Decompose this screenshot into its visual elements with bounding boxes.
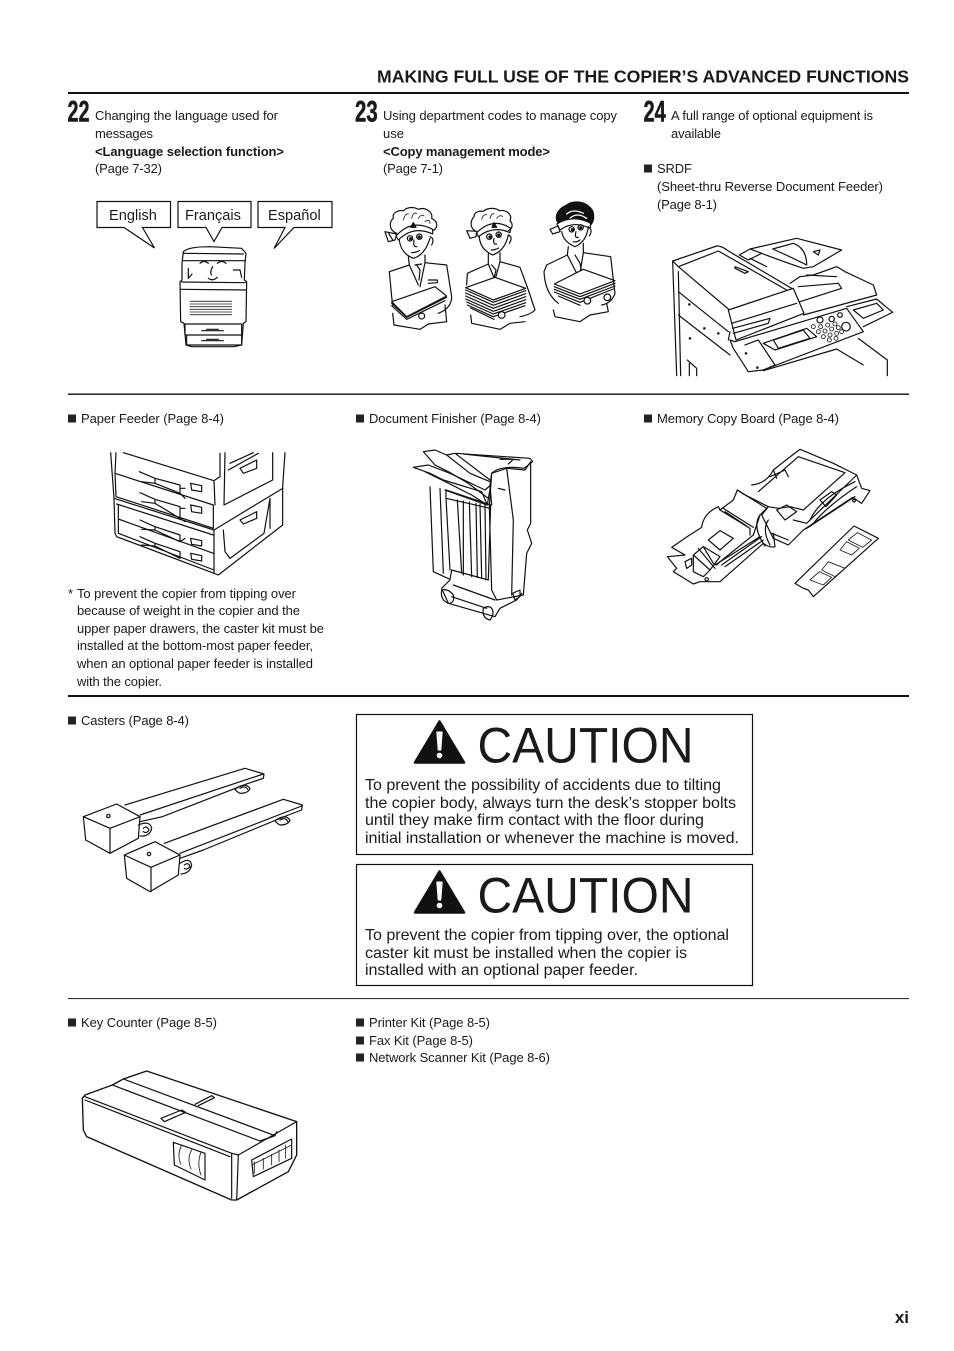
option list: kits: Printer Kit (Page 8-5) bbox=[369, 1015, 490, 1030]
icon: warning triangle bbox=[415, 722, 464, 762]
illustration: key counter bbox=[82, 1071, 297, 1200]
description 24: available bbox=[671, 126, 721, 141]
caution text: installed with an optional paper feeder. bbox=[365, 961, 638, 979]
description 22: Changing the language used for bbox=[95, 108, 279, 123]
section 22 text bbox=[68, 96, 284, 176]
caution text bbox=[365, 926, 729, 979]
caution text: the copier body, always turn the desk’s stopper bolts bbox=[365, 794, 736, 812]
footnote bbox=[68, 586, 324, 689]
option: memory copy board bbox=[644, 411, 878, 597]
label: paper feeder: Paper Feeder (Page 8-4) bbox=[81, 411, 224, 426]
SRDF label: (Sheet-thru Reverse Document Feeder) bbox=[657, 179, 883, 194]
description 24: A full range of optional equipment is bbox=[671, 108, 874, 123]
illustration: speech bubbles and copier bbox=[97, 202, 332, 347]
caster 1 bbox=[83, 768, 264, 853]
page number: xi bbox=[895, 1308, 909, 1327]
icon: warning triangle bbox=[415, 872, 464, 912]
label: casters: Casters (Page 8-4) bbox=[81, 713, 189, 728]
description 22: <Language selection function> bbox=[95, 144, 284, 159]
description 23 bbox=[383, 108, 618, 176]
caution box 2 bbox=[356, 864, 752, 986]
option list: kits: Network Scanner Kit (Page 8-6) bbox=[369, 1050, 550, 1065]
footnote: installed at the bottom-most paper feeder, bbox=[77, 638, 313, 653]
option: paper feeder bbox=[68, 411, 285, 575]
page heading: MAKING FULL USE OF THE COPIER’S ADVANCED FUNCTIONS bbox=[377, 66, 909, 86]
footnote: because of weight in the copier and the bbox=[77, 603, 300, 618]
description 23: Using department codes to manage copy bbox=[383, 108, 618, 123]
caution text: until they make firm contact with the floor during bbox=[365, 811, 704, 829]
description 22: messages bbox=[95, 126, 154, 141]
figure: worker with thin stack bbox=[385, 207, 452, 329]
heading: caution: CAUTION bbox=[478, 868, 694, 924]
illustration: paper feeder bbox=[111, 453, 285, 575]
description 23: (Page 7-1) bbox=[383, 161, 443, 176]
caution text: To prevent the possibility of accidents due to tilting bbox=[365, 776, 721, 794]
number 24: 24 bbox=[644, 96, 666, 129]
label: memory copy board: Memory Copy Board (Page 8-4) bbox=[657, 411, 839, 426]
caster 2 bbox=[124, 799, 302, 892]
illustration: three workers holding paper stacks bbox=[385, 202, 615, 329]
description 22 bbox=[95, 108, 284, 176]
speech bubble: Español bbox=[258, 202, 332, 248]
caution text bbox=[365, 776, 739, 847]
figure: worker with thick stack bbox=[466, 208, 535, 329]
footnote: upper paper drawers, the caster kit must be bbox=[77, 621, 324, 636]
illustration: casters bbox=[83, 768, 302, 892]
footnote: with the copier. bbox=[76, 674, 162, 689]
description 23: use bbox=[383, 126, 404, 141]
description 23: <Copy management mode> bbox=[383, 144, 550, 159]
section 23 text bbox=[355, 96, 618, 176]
speech bubble: Français: Français bbox=[185, 208, 241, 224]
SRDF label bbox=[644, 161, 883, 212]
caution box 1 bbox=[356, 714, 752, 854]
illustration: SRDF bbox=[673, 238, 893, 376]
footnote: when an optional paper feeder is installed bbox=[76, 656, 313, 671]
option: key counter bbox=[68, 1015, 297, 1200]
caution text: To prevent the copier from tipping over, the optional bbox=[365, 926, 729, 944]
speech bubble: English bbox=[97, 202, 170, 248]
option: document finisher bbox=[356, 411, 541, 620]
speech bubble: Español: Español bbox=[268, 208, 321, 224]
description 24 bbox=[671, 108, 874, 141]
number 22: 22 bbox=[68, 96, 90, 129]
illustration: memory copy board bbox=[667, 449, 878, 597]
option: casters bbox=[68, 713, 302, 892]
caution text: caster kit must be installed when the copier is bbox=[365, 944, 687, 962]
icon: smiling copier bbox=[180, 247, 247, 347]
caution text: initial installation or whenever the machine is moved. bbox=[365, 829, 739, 847]
section 24 text bbox=[644, 96, 874, 141]
SRDF label: (Page 8-1) bbox=[657, 197, 717, 212]
figure: worker with dark hair and medium stack bbox=[544, 202, 615, 322]
heading: caution: CAUTION bbox=[478, 718, 694, 774]
footnote: * bbox=[68, 586, 73, 601]
speech bubble: Français bbox=[178, 202, 251, 242]
speech bubble: English: English bbox=[109, 208, 157, 224]
label: key counter: Key Counter (Page 8-5) bbox=[81, 1015, 217, 1030]
label: document finisher: Document Finisher (Page 8-4) bbox=[369, 411, 541, 426]
number 23: 23 bbox=[355, 96, 378, 129]
footnote: To prevent the copier from tipping over bbox=[77, 586, 297, 601]
option list: kits bbox=[356, 1015, 550, 1065]
description 22: (Page 7-32) bbox=[95, 161, 162, 176]
option list: kits: Fax Kit (Page 8-5) bbox=[369, 1033, 473, 1048]
SRDF label: SRDF bbox=[657, 161, 692, 176]
illustration: document finisher bbox=[413, 450, 533, 620]
